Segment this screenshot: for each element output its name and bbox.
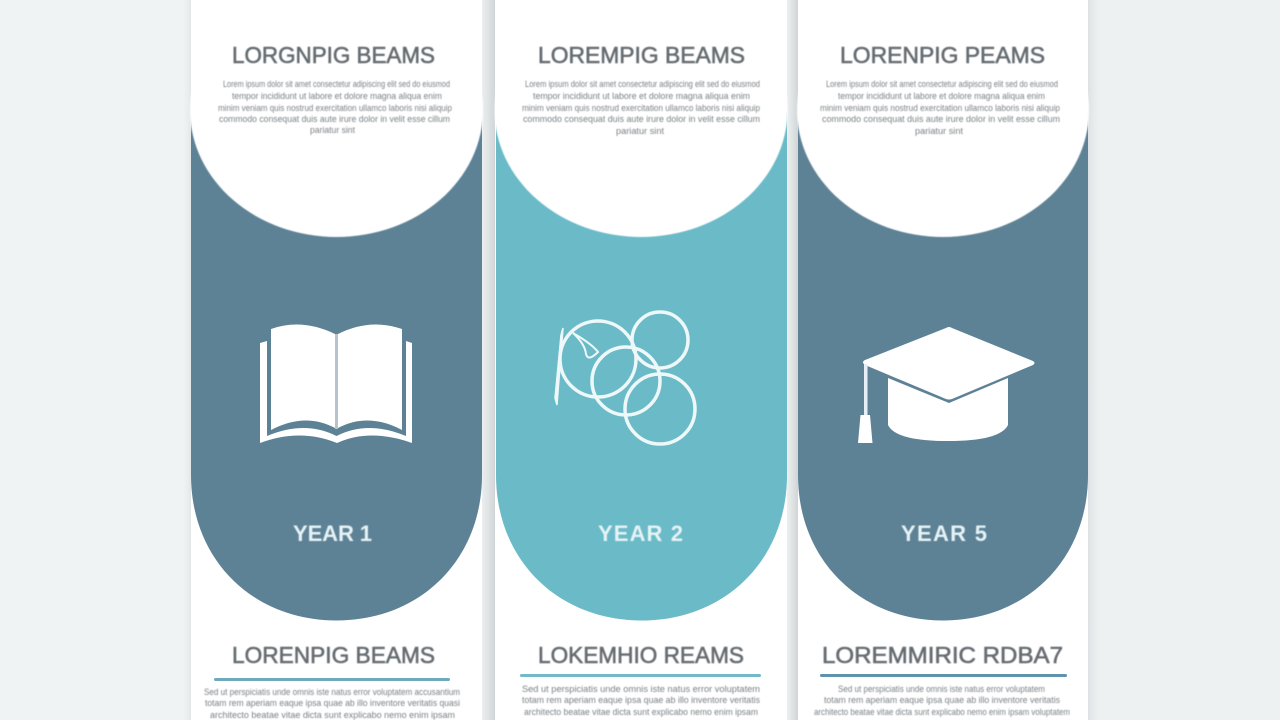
pill: year 1 — [191, 112, 482, 620]
divider line: year 5 — [820, 674, 1067, 677]
text block: top year 2: tempor incididunt ut labore et dolore magna aliqua enim — [533, 91, 750, 101]
pill: year 5 — [798, 112, 1088, 620]
heading: bottom year 2: LOKEMHIO REAMS — [538, 642, 744, 668]
divider line: year 2 — [520, 674, 761, 677]
text block: top year 1 — [218, 79, 452, 135]
text block: bottom year 1: Sed ut perspiciatis unde omnis iste natus error voluptatem accusantium — [204, 687, 460, 697]
white circle: year 2 — [494, 0, 788, 237]
text block: top year 2: Lorem ipsum dolor sit amet consectetur adipiscing elit sed do eiusmod — [525, 79, 760, 89]
text block: top year 2: pariatur sint — [616, 126, 664, 136]
text block: top year 1: tempor incididunt ut labore et dolore magna aliqua enim — [232, 91, 442, 101]
heading: top year 5: LORENPIG PEAMS — [840, 42, 1045, 68]
text block: top year 2: minim veniam quis nostrud exercitation ullamco laboris nisi aliquip — [522, 103, 760, 113]
label: year 5: YEAR 5 — [901, 521, 987, 546]
text block: bottom year 5: Sed ut perspiciatis unde omnis iste natus error voluptatem — [838, 684, 1045, 694]
text block: top year 5: pariatur sint — [915, 126, 963, 136]
icon: graduation cap — [858, 327, 1034, 443]
heading: top year 1: LORGNPIG BEAMS — [232, 42, 435, 68]
white circle: year 5 — [797, 0, 1089, 237]
icon: open book — [260, 325, 412, 443]
text block: bottom year 1: totam rem aperiam eaque ipsa quae ab illo inventore veritatis quasi — [205, 698, 460, 708]
text block: bottom year 2: Sed ut perspiciatis unde omnis iste natus error voluptatem — [522, 684, 760, 694]
text block: top year 5: tempor incididunt ut labore et dolore magna aliqua enim — [838, 91, 1045, 101]
text block: bottom year 1: architecto beatae vitae dicta sunt explicabo nemo enim ipsam — [210, 710, 455, 720]
text block: top year 1: minim veniam quis nostrud exercitation ullamco laboris nisi aliquip — [218, 103, 452, 113]
text block: top year 5: Lorem ipsum dolor sit amet consectetur adipiscing elit sed do eiusmod — [826, 79, 1058, 89]
text block: bottom year 5: architecto beatae vitae dicta sunt explicabo nemo enim ipsam voluptatem — [814, 707, 1070, 717]
text block: top year 1: Lorem ipsum dolor sit amet consectetur adipiscing elit sed do eiusmod — [223, 79, 450, 89]
text block: top year 2 — [522, 79, 760, 136]
text block: bottom year 2: architecto beatae vitae dicta sunt explicabo nemo enim ipsam — [524, 707, 758, 717]
heading: top year 2: LOREMPIG BEAMS — [538, 42, 745, 68]
divider line: year 1 — [214, 678, 450, 681]
icon: overlapping circles — [555, 312, 695, 444]
panel: year 2 — [494, 0, 788, 720]
heading: bottom year 1: LORENPIG BEAMS — [232, 642, 435, 668]
label: year 2: YEAR 2 — [598, 521, 683, 546]
text block: top year 5: minim veniam quis nostrud exercitation ullamco laboris nisi aliquip — [820, 103, 1060, 113]
text block: top year 5: commodo consequat duis aute irure dolor in velit esse cillum — [822, 114, 1060, 124]
panel: year 5 — [797, 0, 1089, 720]
text block: top year 2: commodo consequat duis aute irure dolor in velit esse cillum — [523, 114, 760, 124]
heading: bottom year 5: LOREMMIRIC RDBA7 — [822, 642, 1063, 668]
white circle: year 1 — [190, 0, 483, 237]
text block: bottom year 5 — [814, 684, 1070, 717]
text block: top year 1: pariatur sint — [310, 125, 355, 135]
label: year 1: YEAR 1 — [293, 521, 372, 546]
text block: bottom year 5: totam rem aperiam eaque ipsa quae ab illo inventore veritatis — [824, 695, 1060, 705]
panel: year 1 — [190, 0, 483, 720]
text block: bottom year 2 — [522, 684, 760, 717]
text block: top year 1: commodo consequat duis aute irure dolor in velit esse cillum — [219, 114, 450, 124]
text block: bottom year 1 — [204, 687, 460, 720]
pill: year 2 — [496, 112, 787, 620]
text block: bottom year 2: totam rem aperiam eaque ipsa quae ab illo inventore veritatis — [522, 695, 760, 705]
text block: top year 5 — [820, 79, 1060, 136]
